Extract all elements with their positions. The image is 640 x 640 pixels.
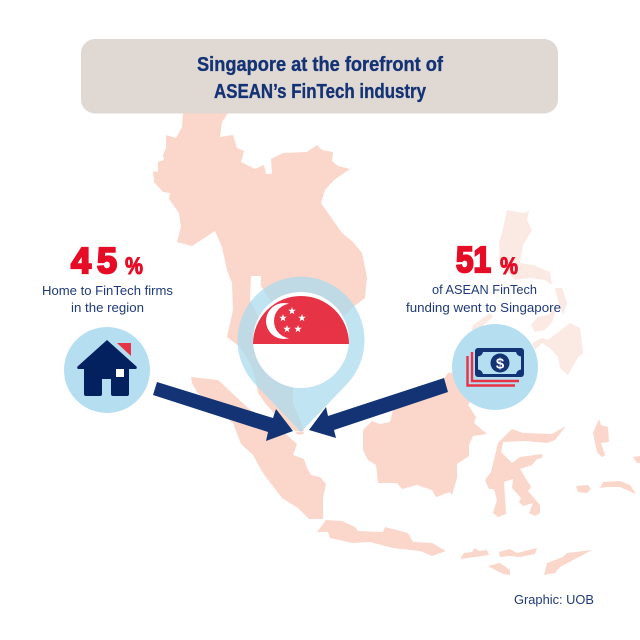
stat: 45 percent: 45 — [71, 240, 117, 281]
map: Java — [317, 520, 446, 556]
text: ASEAN FinTech funding — [406, 282, 561, 315]
location pin with Singapore flag — [237, 277, 364, 432]
arrow: from 45 percent to Singapore — [153, 382, 293, 441]
title text: Singapore at the forefront of — [197, 54, 443, 76]
flag of Singapore — [253, 292, 349, 388]
stat: 51 percent: % — [500, 253, 518, 280]
text: ASEAN FinTech funding: funding went to Singapore — [406, 300, 561, 315]
map: Sumatra — [191, 377, 326, 519]
icon: banknotes — [452, 324, 538, 410]
stat: 51 percent — [456, 239, 518, 280]
title banner — [81, 39, 558, 114]
source credit: Graphic: UOB — [514, 592, 594, 607]
text: ASEAN FinTech funding: of ASEAN FinTech — [432, 282, 537, 297]
map: Philippines — [470, 210, 583, 375]
stat: 45 percent: % — [125, 253, 143, 280]
map: Maluku islands — [576, 419, 640, 494]
map: Singapore — [296, 431, 304, 435]
title text: ASEAN’s FinTech industry — [214, 81, 427, 103]
stat: 51 percent: 51 — [456, 239, 491, 280]
title text — [197, 54, 443, 103]
text: home to FinTech firms — [42, 283, 173, 315]
map: Borneo — [363, 367, 495, 497]
arrow: from 51 percent to Singapore — [309, 378, 448, 438]
stat: 45 percent — [71, 240, 143, 281]
icon: banknotes: $ — [496, 356, 505, 372]
map: mainland and Malay peninsula — [153, 113, 367, 431]
map: Southeast Asia — [153, 113, 640, 575]
text: home to FinTech firms: Home to FinTech firms — [42, 283, 173, 298]
icon: house — [64, 327, 150, 413]
map: Sulawesi — [485, 426, 566, 517]
map: Lesser Sunda islands — [460, 548, 592, 575]
text: home to FinTech firms: in the region — [71, 300, 144, 315]
